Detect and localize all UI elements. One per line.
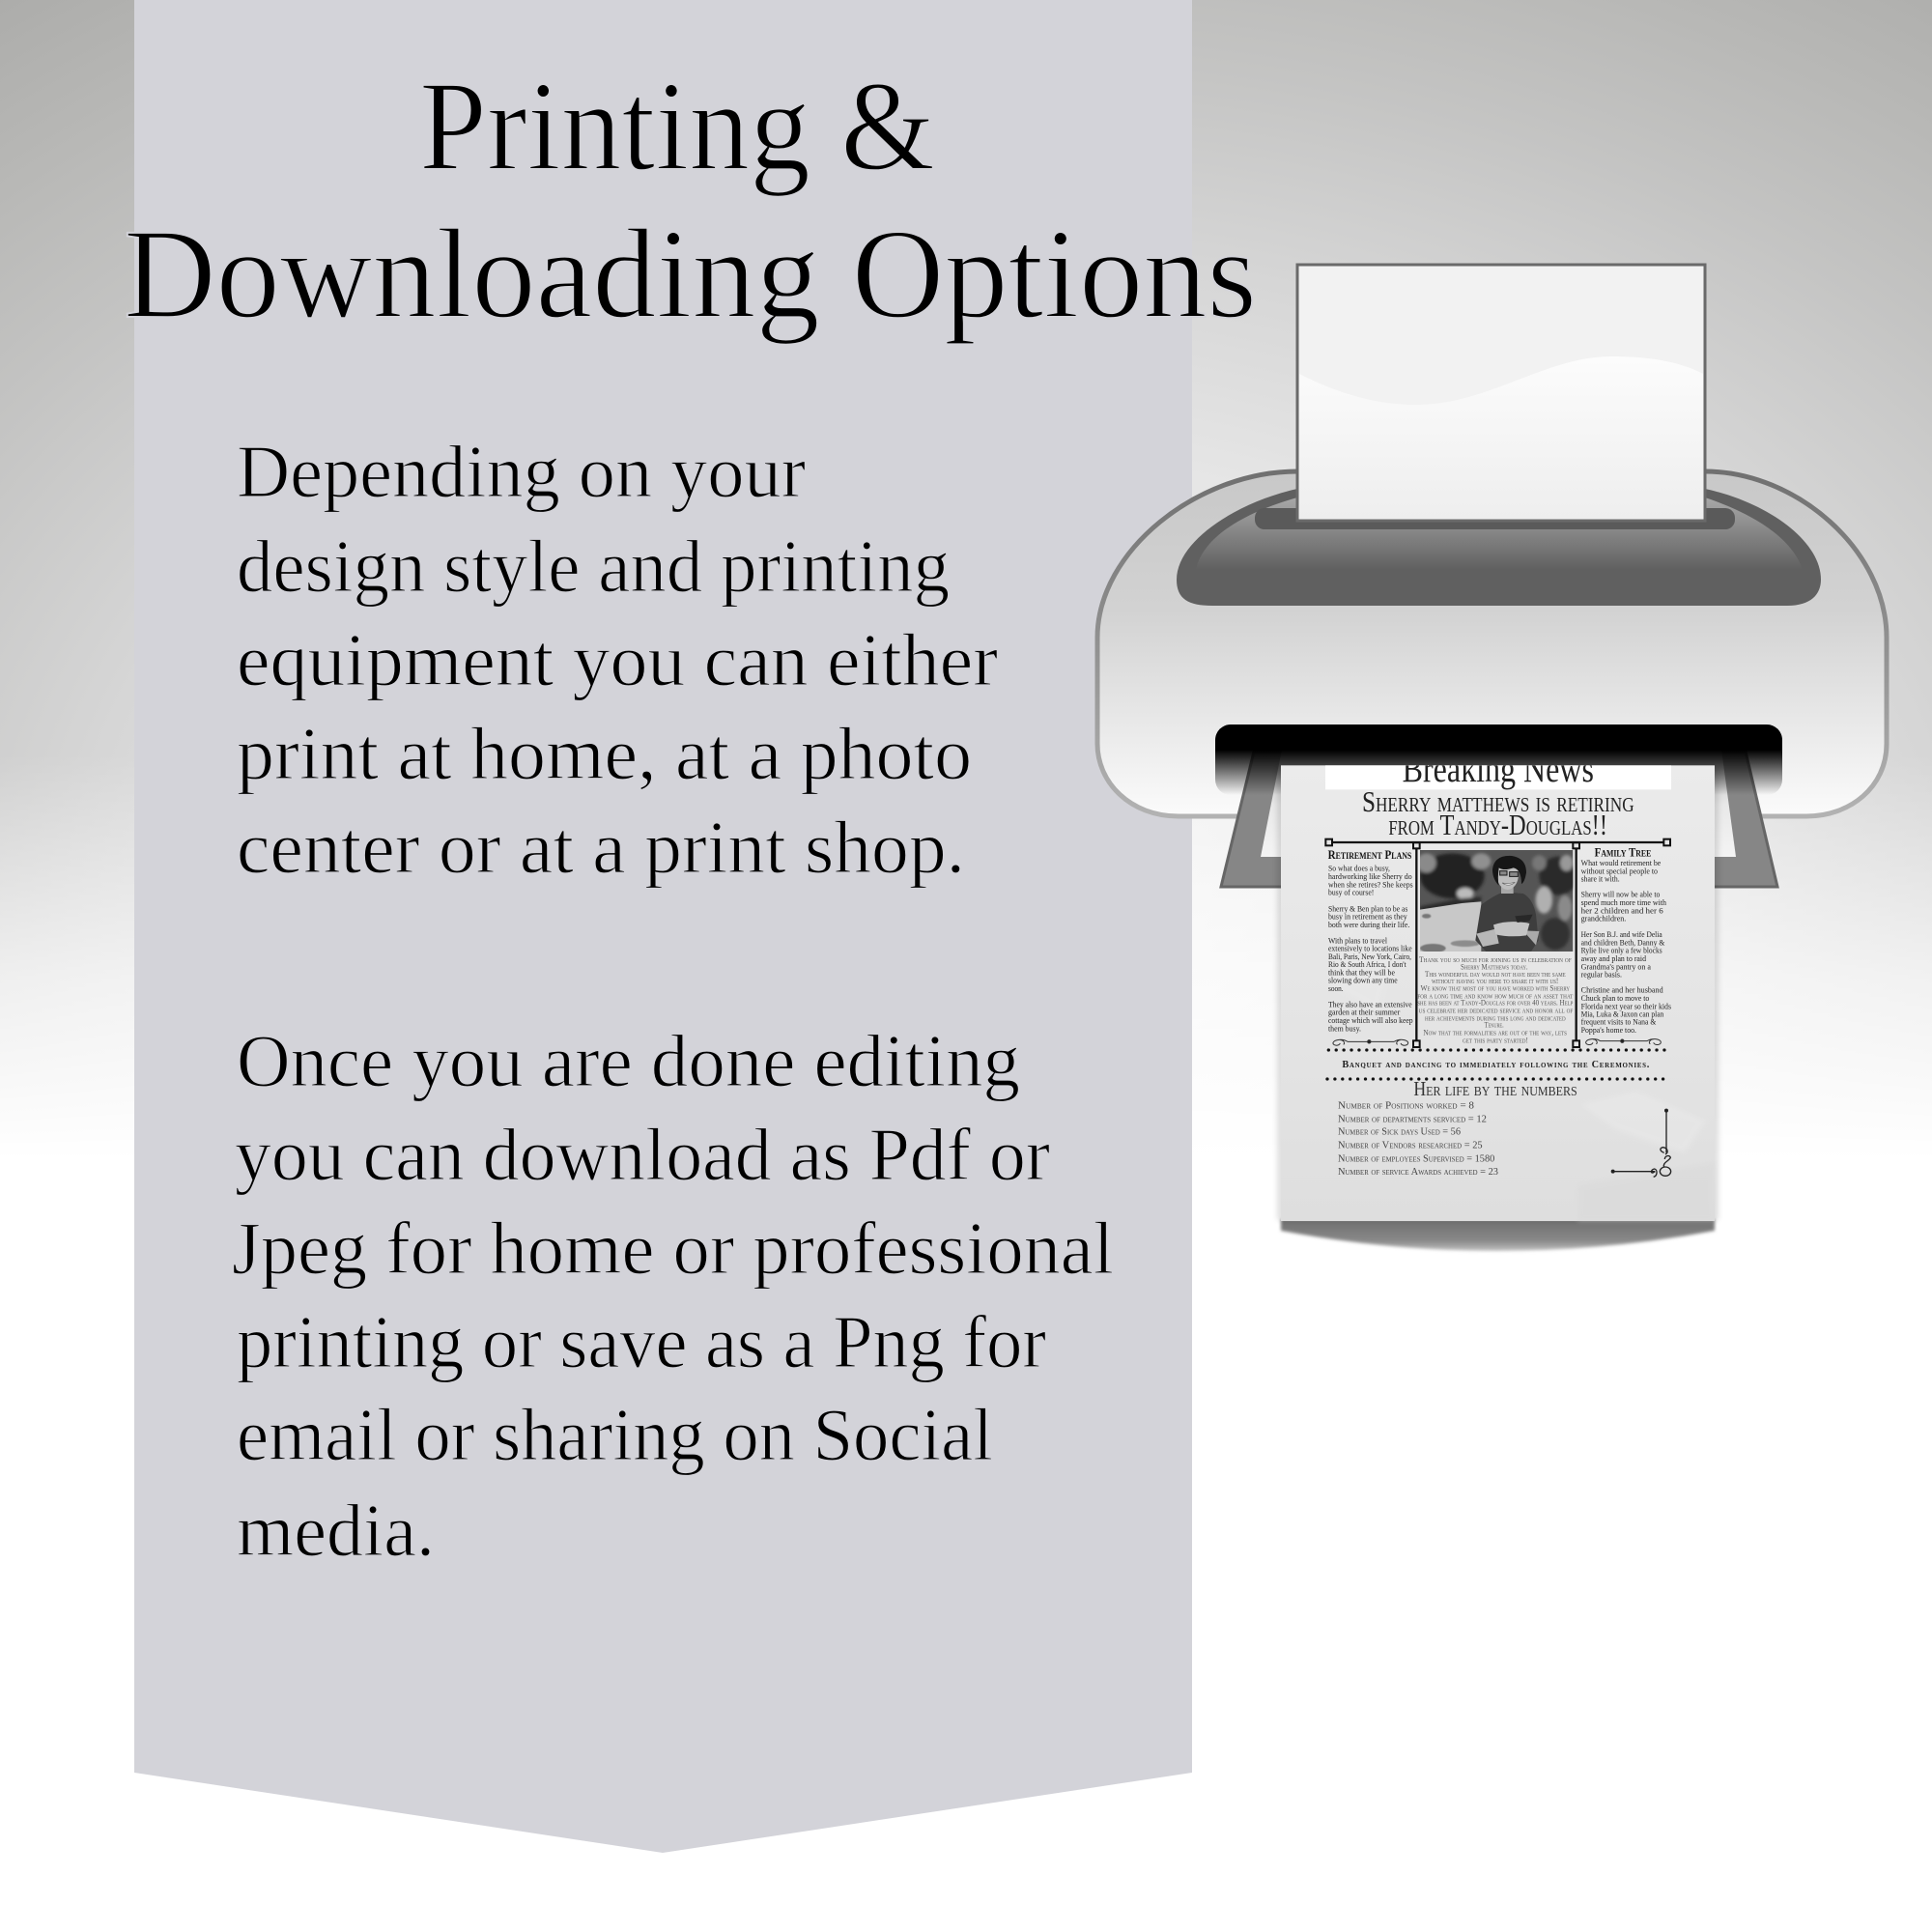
numbers list: Number of departments serviced = 12 [1338,1114,1487,1124]
text block: second paragraph [232,1019,1114,1572]
left column text [1328,865,1413,1033]
right column text: Christine and her husband [1581,986,1663,995]
output slot [1215,724,1782,795]
left column text: when she retires? She keeps [1328,880,1413,889]
center message: without having you here to share it with us! [1432,976,1558,985]
right column text: Sherry will now be able to [1581,891,1660,899]
dotted divider top [1328,1045,1672,1055]
center message: Tenure. [1485,1020,1504,1030]
left column text: extensively to locations like [1328,945,1412,953]
icon: printer [1097,265,1887,887]
right column text: Poppa's home too. [1581,1026,1636,1035]
text block: first paragraph: design style and printing [237,525,950,608]
text block: second paragraph: Once you are done editing [237,1019,1020,1102]
right column text: Mia, Luka & Jaxon can plan [1581,1010,1663,1019]
left column text: think that they will be [1328,968,1395,977]
title: Downloading Options [124,202,1257,345]
right column text: Her Son B.J. and wife Delia [1581,930,1662,939]
printer body [1097,471,1887,816]
right column text: Grandma's pantry on a [1581,962,1651,971]
background fade to white [0,753,1932,1932]
center message: us celebrate her dedicated service and honor all of [1419,1005,1574,1014]
text block: first paragraph: center or at a print shop. [237,806,965,889]
flourish left [1333,1039,1408,1045]
output tray [1221,752,1777,887]
center message: her achievements during this long and dedicated [1425,1012,1566,1022]
blank paper [1297,265,1705,521]
numbers list: Number of Positions worked = 8 [1338,1100,1474,1111]
left column text: busy in retirement as they [1328,913,1407,922]
right column text: Rylie live only a few blocks [1581,947,1662,955]
input tray highlight [1196,497,1803,570]
center message: get this party started! [1463,1035,1528,1044]
left column heading: Retirement Plans [1328,848,1411,862]
center message: she has been at Tandy-Douglas for over 40 years. Help [1417,998,1574,1008]
flourish right [1586,1039,1661,1045]
left column text: Bali, Paris, New York, Cairo, [1328,952,1411,961]
banquet line: Banquet and dancing to immediately following the Ceremonies. [1342,1060,1650,1070]
title: Printing & [419,54,935,197]
left column text: busy of course! [1328,888,1374,896]
corner ornament [1611,1109,1671,1177]
title [124,54,1257,345]
frame lines [1325,839,1670,1047]
right column text: What would retirement be [1581,859,1662,867]
right column text: grandchildren. [1581,915,1626,923]
left column text: With plans to travel [1328,936,1388,945]
left column text: hardworking like Sherry do [1328,872,1412,881]
text block: second paragraph: media. [237,1489,435,1572]
text block: second paragraph: email or sharing on Social [237,1393,993,1476]
panel: grey banner [134,0,1192,1853]
watercolor texture [1330,915,1715,1221]
output tray inner [1261,750,1736,857]
headline [1362,785,1634,841]
woman [1475,856,1539,952]
text block: second paragraph: printing or save as a Png for [237,1300,1046,1383]
printed newsletter [1281,748,1715,1221]
center message: Thank you so much for joining us in celebration of [1419,954,1572,964]
left column text: them busy. [1328,1024,1361,1033]
numbers list: Number of employees Supervised = 1580 [1338,1153,1494,1164]
numbers list: Number of service Awards achieved = 23 [1338,1167,1498,1178]
dotted divider bottom [1327,1074,1670,1084]
center message [1417,954,1574,1044]
left column text: garden at their summer [1328,1009,1401,1017]
input tray [1177,489,1821,606]
left column text: both were during their life. [1328,921,1409,929]
numbers list: Number of Sick days Used = 56 [1338,1127,1462,1138]
right column text: Florida next year so their kids [1581,1002,1671,1010]
document shadow [1281,1219,1715,1251]
left column text: They also have an extensive [1328,1000,1412,1009]
center message: This wonderful day would not have been the same [1425,969,1566,979]
right column text: away and plan to raid [1581,954,1646,963]
left column text: slowing down any time [1328,977,1398,985]
left column text: Sherry & Ben plan to be as [1328,905,1407,914]
headline: from Tandy-Douglas!! [1388,809,1607,841]
right column text: spend much more time with [1581,898,1666,907]
photo: smiling woman holding phone [1417,850,1577,952]
right column text: without special people to [1581,867,1658,875]
text block: first paragraph: Depending on your [237,430,806,513]
left column text: Rio & South Africa, I don't [1328,960,1406,969]
numbers heading: Her life by the numbers [1413,1079,1577,1100]
right column text: her 2 children and her 6 [1581,906,1663,915]
numbers list [1338,1100,1498,1178]
center message: Now that the formalities are out of the way, lets [1423,1027,1567,1037]
paper slot [1255,508,1735,529]
text block: second paragraph: you can download as Pdf or [235,1113,1050,1196]
right column heading: Family Tree [1595,846,1651,860]
numbers list: Number of Vendors researched = 25 [1338,1141,1483,1151]
right column text: frequent visits to Nana & [1581,1018,1657,1027]
left column text: soon. [1328,984,1344,993]
masthead [1325,765,1671,790]
right column text [1581,859,1671,1035]
text block: first paragraph [237,430,998,889]
text block: second paragraph: Jpeg for home or professional [232,1207,1114,1290]
center message: We know that most of you have worked with Sherry [1421,982,1571,992]
text block: first paragraph: equipment you can either [237,618,998,701]
right column text: and children Beth, Danny & [1581,938,1665,947]
text block: first paragraph: print at home, at a photo [237,712,972,795]
document side shadow [1277,768,1719,1220]
center message: Sherry Matthews today. [1461,961,1528,971]
left column text: cottage which will also keep [1328,1016,1413,1025]
masthead: Breaking News [1403,748,1594,790]
right column text: Chuck plan to move to [1581,994,1649,1003]
center message: for a long time and know how much of an asset that [1417,990,1574,1000]
road [1420,901,1481,952]
right column text: share it with. [1581,875,1620,884]
left column text: So what does a busy, [1328,865,1390,873]
headline: Sherry matthews is retiring [1362,785,1634,818]
right column text: regular basis. [1581,970,1622,979]
newsletter page [1281,765,1715,1221]
